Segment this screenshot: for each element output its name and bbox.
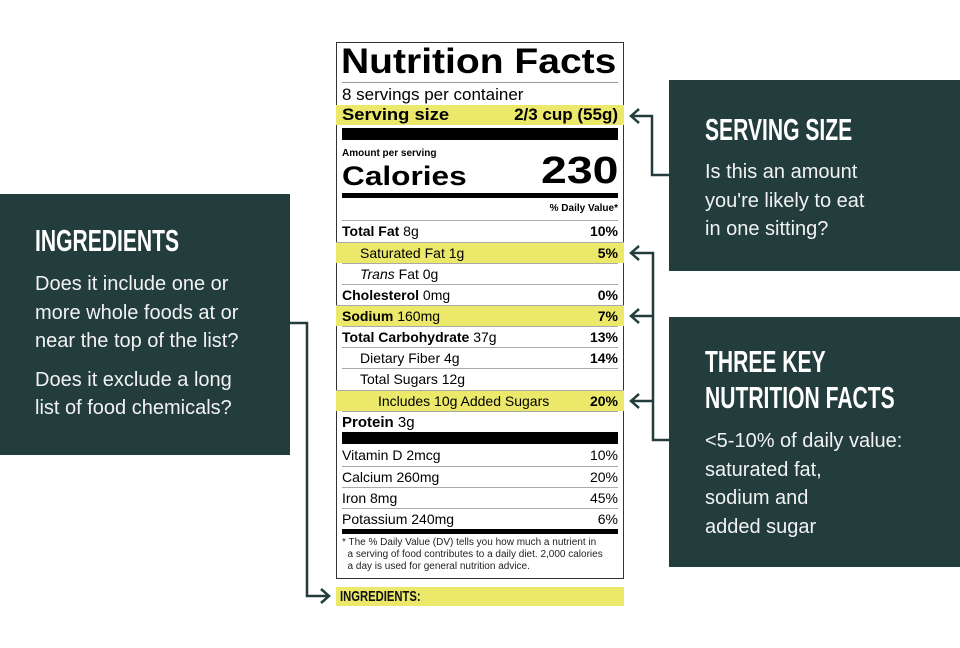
nutrient rows: Includes 10g Added Sugars <box>378 393 549 409</box>
text: daily value advice: <5-10% of daily value: <box>705 430 902 452</box>
nutrient rows: Cholesterol 0mg <box>342 287 450 303</box>
heading: serving size: SERVING SIZE <box>705 112 852 147</box>
vitamin rows <box>342 447 618 527</box>
text: daily value advice: added sugar <box>705 516 816 538</box>
heading: three key nutrition facts: THREE KEY <box>705 344 826 379</box>
arrow: ingredients <box>290 323 329 603</box>
nutrient rows: 14% <box>590 350 618 366</box>
daily value header: % Daily Value* <box>550 203 618 214</box>
text: daily value advice: sodium and <box>705 487 808 509</box>
text: daily value advice <box>705 430 902 538</box>
nutrient rows <box>336 220 624 431</box>
nutrient rows: 5% <box>598 245 618 261</box>
calories block <box>342 148 618 192</box>
vitamin rows: Calcium 260mg <box>342 469 439 485</box>
ingredients strip: INGREDIENTS: <box>340 588 421 605</box>
nutrient rows: 13% <box>590 329 618 345</box>
arrow: serving size <box>631 109 669 175</box>
text: ingredients questions: near the top of the list? Does it exclude a long <box>35 330 238 390</box>
nutrient rows: 0% <box>598 287 618 303</box>
text: ingredients questions: more whole foods at or <box>35 302 238 324</box>
nutrient rows: Sodium 160mg <box>342 308 440 324</box>
panel: three key nutrition facts <box>669 317 960 567</box>
vitamin rows: Vitamin D 2mcg <box>342 447 441 463</box>
nutrient rows: Total Sugars 12g <box>360 371 465 387</box>
title: nutrition facts: Nutrition Facts <box>341 42 616 81</box>
vitamin rows: 10% <box>590 447 618 463</box>
nutrient rows: Trans Fat 0g <box>360 266 438 282</box>
vitamin rows: 20% <box>590 469 618 485</box>
footnote <box>342 537 603 572</box>
vitamin rows: 45% <box>590 490 618 506</box>
panel: serving size <box>669 80 960 271</box>
vitamin rows: 6% <box>598 511 618 527</box>
calories block: Amount per serving <box>342 148 436 159</box>
panel: ingredients <box>0 194 290 455</box>
text: serving size question: you're likely to eat <box>705 190 864 212</box>
ingredients strip <box>336 587 624 606</box>
text: daily value advice: saturated fat, <box>705 458 822 480</box>
nutrient rows: Protein 3g <box>342 414 415 431</box>
servings per container: 8 servings per container <box>342 85 523 104</box>
serving size row: Serving size <box>342 105 449 124</box>
nutrient rows: Total Carbohydrate 37g <box>342 329 497 345</box>
nutrient rows: Saturated Fat 1g <box>360 245 464 261</box>
nutrient rows: 7% <box>598 308 618 324</box>
heading: ingredients: INGREDIENTS <box>35 223 179 258</box>
arrow: key nutrition facts <box>631 246 669 440</box>
calories block: Calories <box>342 161 467 191</box>
heading: three key nutrition facts: NUTRITION FACTS <box>705 380 895 415</box>
text: serving size question: Is this an amount <box>705 161 857 183</box>
text: serving size question: in one sitting? <box>705 218 828 240</box>
heading: three key nutrition facts <box>705 344 895 415</box>
vitamin rows: Potassium 240mg <box>342 511 454 527</box>
nutrition facts label <box>336 42 624 579</box>
vitamin rows: Iron 8mg <box>342 490 397 506</box>
footnote: a serving of food contributes to a daily diet. 2,000 calories <box>348 549 603 560</box>
text: ingredients questions: Does it include one or <box>35 273 228 295</box>
text: serving size question <box>705 161 864 240</box>
text: ingredients questions: list of food chemicals? <box>35 397 232 419</box>
nutrient rows: Total Fat 8g <box>342 223 419 239</box>
nutrient rows: Dietary Fiber 4g <box>360 350 460 366</box>
nutrient rows: 10% <box>590 223 618 239</box>
serving size row <box>336 105 624 125</box>
footnote: a day is used for general nutrition advice. <box>348 561 530 572</box>
nutrient rows: 20% <box>590 393 618 409</box>
calories block: 230 <box>541 150 618 192</box>
text: ingredients questions <box>35 273 238 419</box>
serving size row: 2/3 cup (55g) <box>514 105 618 124</box>
footnote: * The % Daily Value (DV) tells you how much a nutrient in <box>342 537 596 548</box>
